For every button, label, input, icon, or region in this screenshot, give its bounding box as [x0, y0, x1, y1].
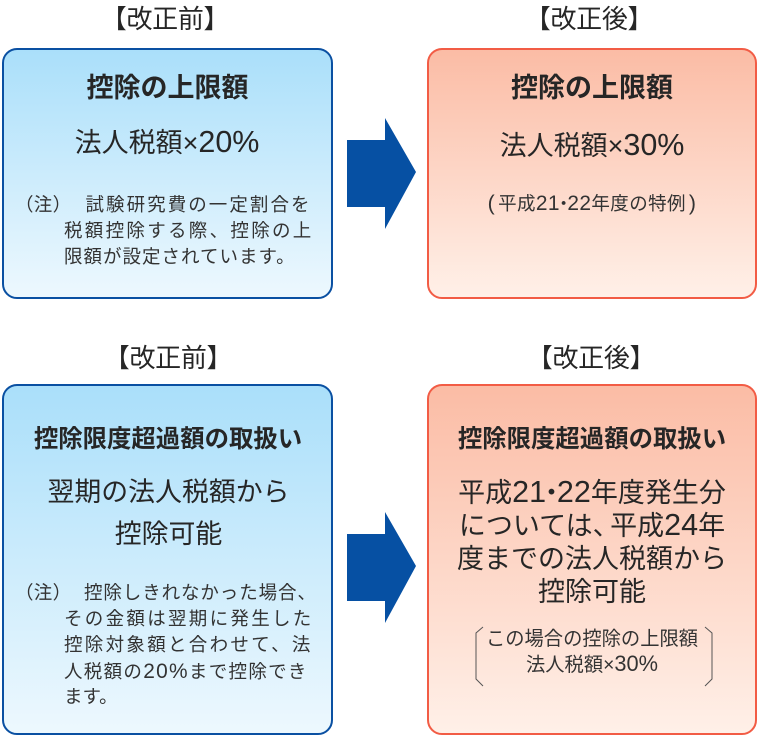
panel: after, upper limit: [427, 48, 757, 299]
main text: [47, 477, 290, 549]
note: [15, 194, 314, 267]
left bracket: [476, 626, 484, 686]
panel title: 控除限度超過額の取扱い: [458, 426, 726, 453]
heading: after revision, top: 【改正後】: [525, 4, 653, 34]
right bracket: [704, 626, 712, 686]
panel title: 控除の上限額: [511, 73, 673, 103]
panel title: 控除限度超過額の取扱い: [34, 426, 302, 453]
bracket note: [486, 628, 698, 676]
note: その金額は翌期に発生した: [64, 608, 314, 629]
bracket note: この場合の控除の上限額: [486, 629, 698, 650]
panel title: 控除の上限額: [86, 73, 248, 103]
note: 試験研究費の一定割合を: [86, 194, 312, 215]
note: (平成21・22年度の特例): [488, 191, 696, 215]
bracket note: 法人税額×30%: [526, 651, 658, 676]
note: 控除対象額と合わせて、法: [64, 634, 313, 655]
panel: before, excess handling: [2, 384, 333, 735]
panel: after, excess handling: [427, 384, 757, 735]
note: 人税額の20%まで控除でき: [64, 660, 308, 683]
main text: 度までの法人税額から: [457, 544, 727, 574]
note: （注）: [15, 194, 71, 215]
heading: before revision, top: 【改正前】: [101, 4, 229, 34]
heading: after revision, bottom: 【改正後】: [527, 343, 655, 373]
note: 限額が設定されています。: [64, 246, 296, 267]
main text: については、平成24年: [459, 508, 725, 542]
main text: [457, 475, 727, 607]
main rate: 法人税額×30%: [500, 128, 684, 162]
note: 控除しきれなかった場合、: [84, 582, 317, 603]
note: 税額控除する際、控除の上: [64, 220, 314, 241]
arrow: top: [347, 118, 416, 229]
note: （注）: [15, 582, 71, 603]
main text: 控除可能: [538, 577, 646, 607]
main text: 翌期の法人税額から: [47, 477, 290, 507]
panel: before, upper limit: [2, 48, 333, 299]
main text: 控除可能: [115, 519, 222, 549]
heading: before revision, bottom: 【改正前】: [104, 343, 232, 373]
main text: 平成21・22年度発生分: [458, 475, 726, 509]
note: [15, 582, 317, 707]
note: ます。: [64, 686, 118, 707]
main rate: 法人税額×20%: [75, 125, 259, 159]
arrow: bottom: [347, 512, 416, 623]
